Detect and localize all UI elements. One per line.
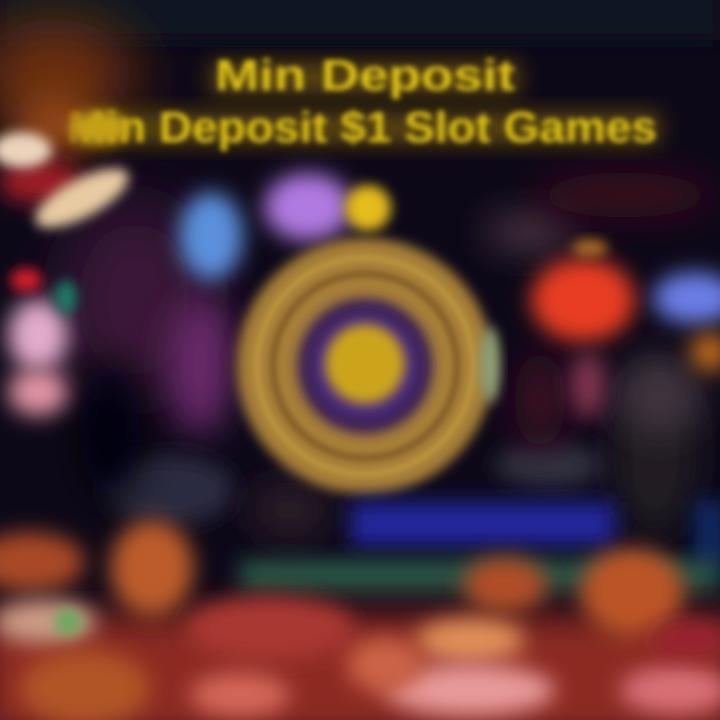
foreground: orange and red blobs	[0, 520, 720, 720]
icon: blue balloon	[179, 192, 243, 280]
icon: red lantern	[531, 239, 635, 419]
title	[67, 51, 657, 152]
icon: pink figure left	[8, 268, 77, 416]
title glow	[70, 62, 660, 144]
chart: prize wheel	[237, 238, 500, 494]
title: Min Deposit $1 Slot Games	[67, 103, 657, 152]
green table	[240, 560, 720, 592]
icon: santa figure top left	[0, 97, 137, 239]
title: Min Deposit	[215, 51, 515, 100]
blue band	[350, 500, 720, 570]
icon: purple balloon	[264, 173, 352, 241]
icon: blue lantern right	[653, 272, 720, 372]
icon: gold coin	[345, 185, 391, 231]
